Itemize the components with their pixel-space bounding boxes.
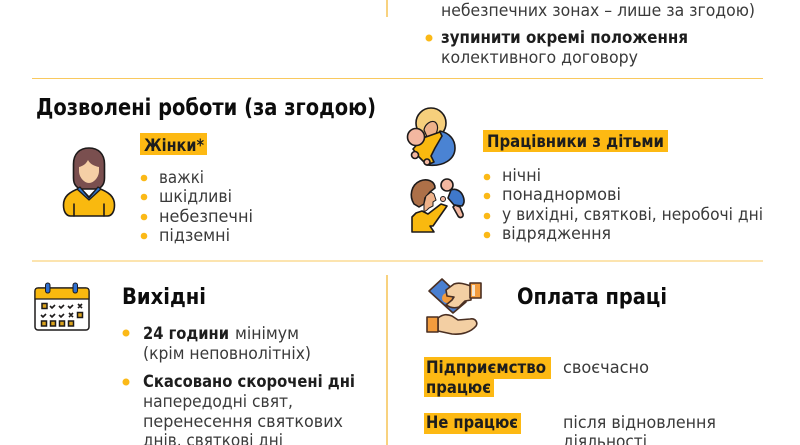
row: enterprise working [424,357,649,397]
icon: mother holding baby [408,108,455,165]
row: enterprise working: працює [426,378,491,397]
list: workers with children work types: у вихідні, святкові, неробочі дні [502,205,763,224]
text block: top rights list: небезпечних зонах – лише за згодою) [441,1,755,20]
row: not working: Не працює [426,413,518,432]
icon: calendar [35,283,89,330]
text block: top rights list: зупинити окремі положення [441,28,688,47]
text block: top rights list [426,1,755,67]
list: days off: Скасовано скорочені дні [143,372,355,391]
heading: days off: Вихідні [122,285,206,310]
list: workers with children work types [484,166,763,243]
text block: top rights list: колективного договору [441,48,638,67]
list: women work types: важкі [159,168,204,187]
list: days off: 24 години [143,324,229,343]
list: days off: (крім неповнолітніх) [143,344,311,363]
list: workers with children work types: відрядження [502,224,611,243]
list: women work types [141,168,253,245]
list: workers with children work types: нічні [502,166,541,185]
list: days off: перенесення святкових [143,412,343,431]
list: workers with children work types: понаднормові [502,185,621,204]
list: women work types: шкідливі [159,187,232,206]
list: women work types: підземні [159,226,230,245]
icon: woman [64,148,114,216]
list: days off: мінімум [235,324,299,343]
row: enterprise working: Підприємство [426,358,546,377]
row: enterprise working: своєчасно [563,358,649,377]
icon: hands with money [427,279,481,334]
icon: parent lifting child [411,179,464,232]
label: workers with children: Працівники з дітьми [487,132,664,151]
list: days off: напередодні свят, [143,392,293,411]
list: women work types: небезпечні [159,207,253,226]
heading: permitted work: Дозволені роботи (за згодою) [36,95,376,121]
row: not working: після відновлення [563,413,716,432]
label: women: Жінки* [144,136,204,155]
row: not working [424,413,716,445]
list: days off [122,324,355,445]
heading: pay: Оплата праці [517,285,667,310]
